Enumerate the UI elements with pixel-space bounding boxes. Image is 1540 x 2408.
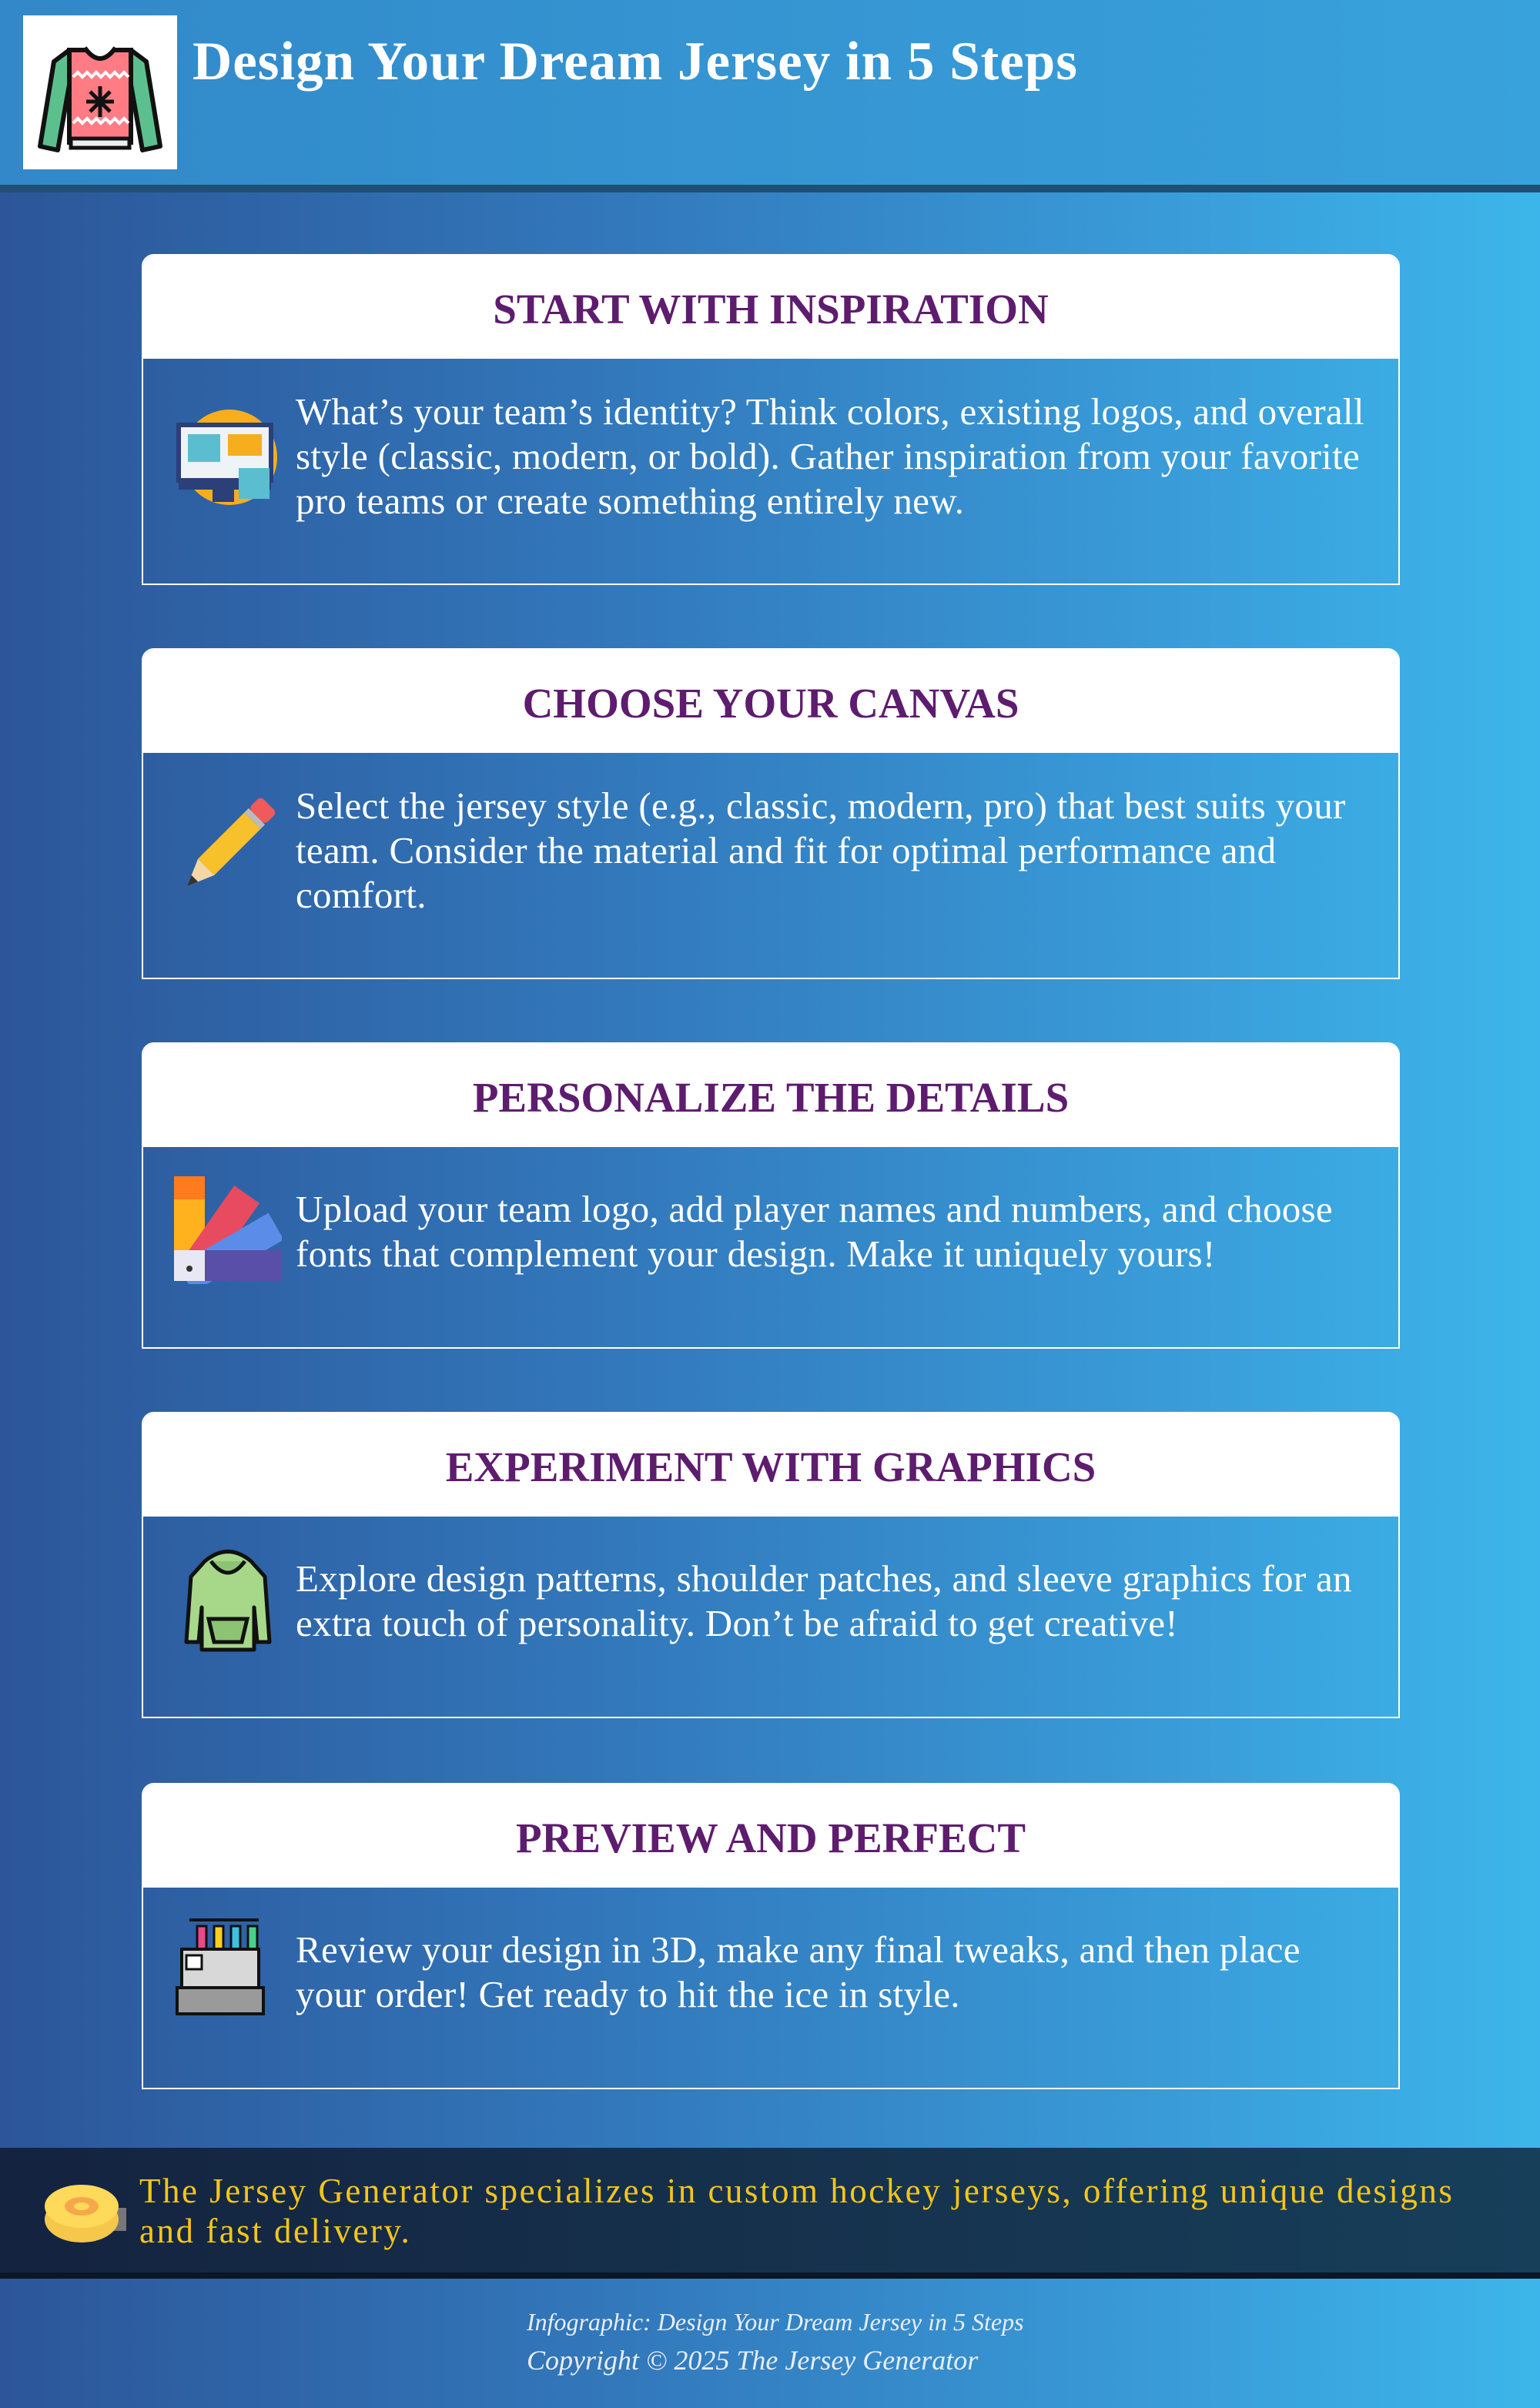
- panel: step 2: [142, 648, 1400, 979]
- footer text: Infographic: Design Your Dream Jersey in 5 Steps: [527, 2308, 1024, 2336]
- title: Design Your Dream Jersey in 5 Steps: [192, 32, 1078, 92]
- text: Explore design patterns, shoulder patches, and sleeve graphics for an: [296, 1557, 1352, 1600]
- heading: preview and perfect: [143, 1784, 1398, 1888]
- text: pro teams or create something entirely new.: [296, 480, 964, 522]
- heading: choose your canvas: [143, 650, 1398, 753]
- heading: personalize the details: PERSONALIZE THE DETAILS: [473, 1074, 1069, 1121]
- icon: monitor: [176, 410, 277, 505]
- text: What’s your team’s identity? Think colors, existing logos, and overall: [296, 390, 1364, 433]
- text: style (classic, modern, or bold). Gather inspiration from your favorite: [296, 435, 1360, 477]
- text: [139, 2172, 1454, 2250]
- text: team. Consider the material and fit for optimal performance and: [296, 829, 1276, 871]
- panel: step 1: [142, 254, 1400, 585]
- panel: step 3: [142, 1042, 1400, 1349]
- text: [296, 1188, 1333, 1275]
- text: [296, 784, 1346, 916]
- heading: experiment with graphics: EXPERIMENT WITH GRAPHICS: [446, 1443, 1096, 1490]
- text: extra touch of personality. Don’t be afraid to get creative!: [296, 1602, 1178, 1644]
- heading: start with inspiration: START WITH INSPIRATION: [493, 286, 1049, 333]
- text: [296, 1557, 1352, 1644]
- text: Upload your team logo, add player names and numbers, and choose: [296, 1188, 1333, 1230]
- text: fonts that complement your design. Make it uniquely yours!: [296, 1232, 1216, 1275]
- text: Select the jersey style (e.g., classic, modern, pro) that best suits your: [296, 784, 1346, 827]
- heading: choose your canvas: CHOOSE YOUR CANVAS: [523, 680, 1019, 727]
- heading: personalize the details: [143, 1044, 1398, 1147]
- text: and fast delivery.: [139, 2212, 411, 2250]
- footer band: company info: [0, 2148, 1540, 2279]
- heading: experiment with graphics: [143, 1413, 1398, 1517]
- text: [296, 390, 1364, 522]
- heading: start with inspiration: [143, 256, 1398, 359]
- text: Review your design in 3D, make any final tweaks, and then place: [296, 1928, 1301, 1971]
- logo: sweater icon: [23, 15, 177, 169]
- heading: preview and perfect: PREVIEW AND PERFECT: [516, 1814, 1026, 1861]
- icon: color swatches: [174, 1176, 282, 1284]
- text: your order! Get ready to hit the ice in style.: [296, 1973, 960, 2015]
- text: comfort.: [296, 874, 427, 916]
- icon: hoodie: [185, 1549, 271, 1652]
- copyright: Copyright © 2025 The Jersey Generator: [527, 2345, 978, 2376]
- panel: step 4: [142, 1412, 1400, 1718]
- header: [0, 0, 1540, 192]
- icon: tape measure: [45, 2185, 126, 2242]
- icon: pencil: [187, 798, 276, 886]
- text: [296, 1928, 1301, 2015]
- panel: step 5: [142, 1783, 1400, 2089]
- text: The Jersey Generator specializes in custom hockey jerseys, offering unique designs: [139, 2172, 1454, 2210]
- icon: sewing machine: [176, 1918, 265, 2015]
